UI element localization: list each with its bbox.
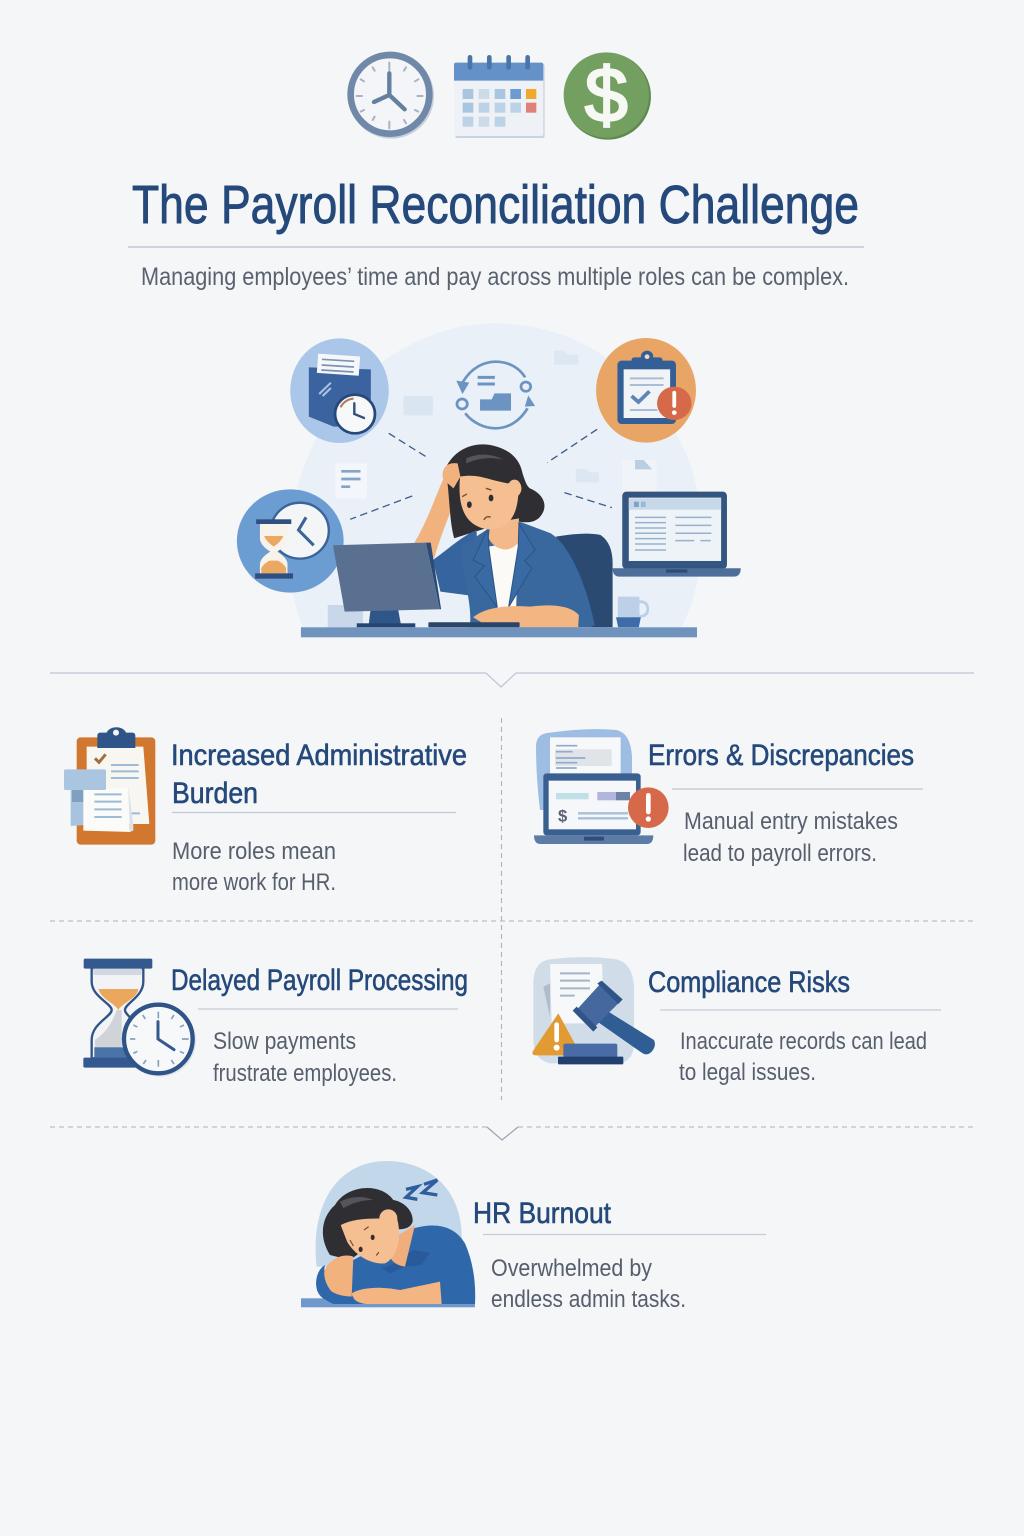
jacket sleeve [433,530,478,597]
ear [508,480,521,497]
icon: dollar coin: $ [585,53,628,139]
top icon row: clock, calendar, dollar [349,52,651,140]
hair fringe [451,445,523,500]
icon: sleeping employee [301,1161,475,1307]
woman at desk [414,444,595,627]
icon: dollar coin [564,52,651,140]
title: The Payroll Reconciliation Challenge [132,175,859,235]
icon: clipboard alert circle [596,338,696,443]
icon: calendar [454,57,545,138]
laptop [613,492,741,577]
panel: delayed payroll processing [83,959,468,1087]
chevron arrow [487,1127,518,1140]
icon: folder and clock circle [290,338,389,443]
hero illustration: stressed HR worker at desk [237,323,741,637]
jacket [461,522,595,627]
panel: HR burnout: endless admin tasks. [491,1286,686,1313]
panel: increased administrative burden: Burden [172,777,258,810]
panel: HR burnout [301,1161,766,1313]
heading: Increased Administrative [171,739,467,772]
icon: hourglass and clock circle [237,489,344,593]
subtitle: Managing employees’ time and pay across multiple roles can be complex. [141,263,849,291]
dashed connector lines [350,429,612,519]
heading: HR Burnout [473,1197,612,1230]
heading: Compliance Risks [648,966,850,999]
neck [489,518,519,549]
description: Slow payments [213,1028,356,1055]
icon: laptop with error badge: $ [558,806,568,825]
icon: laptop with error badge [534,729,669,844]
computer monitor [333,543,441,627]
eyes and mouth [467,501,472,508]
icon: sync arrows with folder [456,362,535,428]
coffee mug [616,597,648,627]
raised arm [414,479,459,558]
panel: errors and discrepancies: lead to payroll errors. [683,840,877,867]
panel: delayed payroll processing: frustrate employees. [213,1060,397,1087]
hand on head [443,463,460,488]
keyboard [428,622,520,627]
faint background documents [328,351,657,627]
desk [301,627,697,637]
face [460,476,521,529]
panel: increased administrative burden: more work for HR. [172,869,336,896]
grid dividers [50,718,974,1127]
heading: Delayed Payroll Processing [171,964,468,997]
hair back [446,444,544,538]
heading: Errors & Discrepancies [648,739,914,772]
background blob [289,323,702,627]
panel: increased administrative burden [64,727,467,896]
office chair [556,534,613,627]
description: More roles mean [172,838,336,865]
description: Manual entry mistakes [684,808,898,835]
icon: gavel with warning [532,957,655,1064]
icon: clock [349,53,434,139]
panel: compliance risks: to legal issues. [679,1059,816,1086]
description: Inaccurate records can lead [680,1028,927,1055]
icon: hourglass with clock [83,959,196,1077]
shirt [489,542,518,608]
description: Overwhelmed by [491,1255,653,1282]
panel: compliance risks [532,957,941,1086]
typing forearm [473,605,579,627]
icon: clipboard with papers [64,727,155,845]
panel: errors and discrepancies [534,729,923,867]
lapels [473,523,535,607]
section divider with chevron [50,673,974,687]
